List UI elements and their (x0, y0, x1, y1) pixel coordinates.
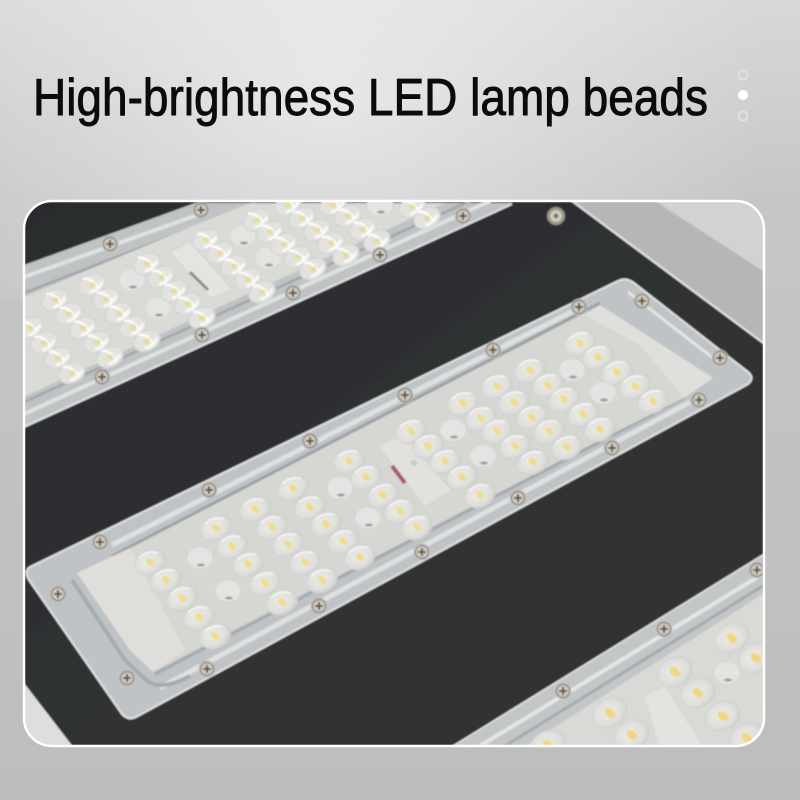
LED beads (130, 325, 673, 654)
pagination dots (738, 70, 748, 120)
upper module device (172, 244, 230, 296)
lower module screws (554, 562, 766, 700)
silver housing bottom left (24, 683, 74, 748)
module screws (50, 292, 728, 686)
upper LED module (13, 190, 512, 427)
photo panel: LED lamp close-up (13, 190, 778, 765)
lamp housing board (24, 201, 764, 746)
right end plate (585, 305, 713, 398)
board screw (547, 207, 565, 225)
lower module lens hole (715, 663, 739, 683)
title: High-brightness LED lamp beads (33, 69, 708, 127)
module body (27, 279, 751, 718)
lens holes (187, 359, 616, 602)
upper module LED beads (25, 202, 442, 384)
centre device (380, 438, 450, 505)
lower LED module (452, 552, 763, 745)
module inner panel (130, 308, 684, 669)
upper module lens holes (119, 194, 393, 319)
module rails (72, 292, 722, 688)
lower module device (645, 687, 702, 746)
photo frame border (24, 201, 764, 746)
main LED module (27, 279, 751, 718)
silver housing top right (572, 201, 766, 345)
lower module LED beads (533, 628, 762, 745)
left end plate (77, 548, 185, 672)
upper module screws (94, 202, 472, 386)
